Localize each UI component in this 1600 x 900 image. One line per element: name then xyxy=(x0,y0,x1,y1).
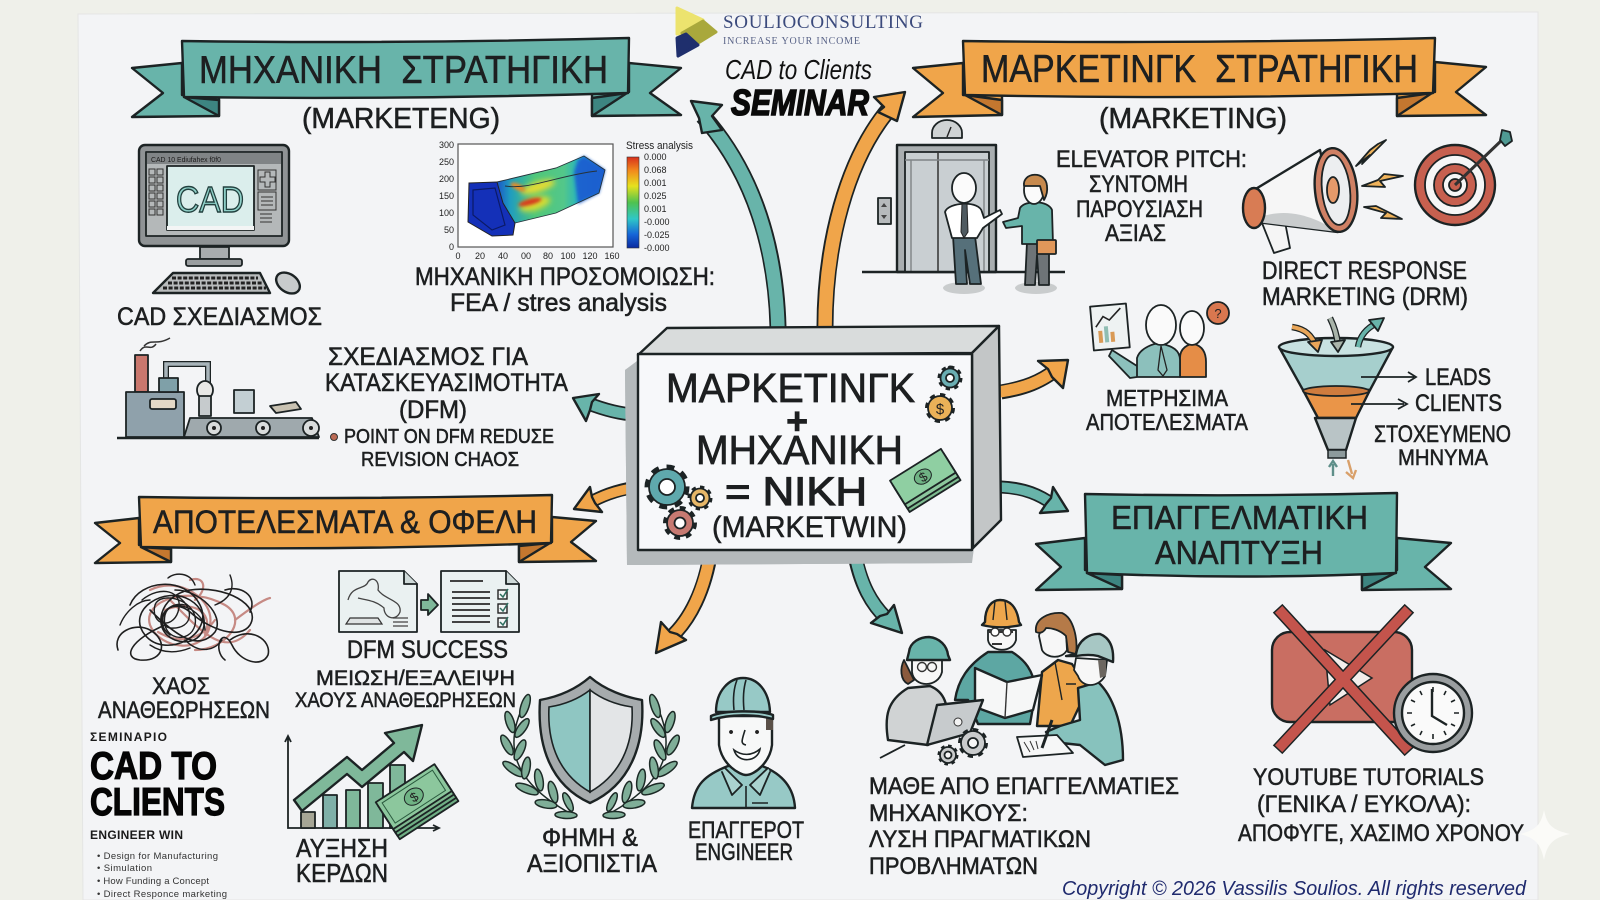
chart: FEA stress analysis: 0.068 xyxy=(644,165,667,175)
seminar script title: CAD to Clients xyxy=(725,54,872,85)
chart: FEA stress analysis: 0 xyxy=(449,242,454,252)
label: learn from professional engineers: ΛΥΣΗ ΠΡΑΓΜΑΤΙΚΩΝ xyxy=(869,826,1091,853)
chart: FEA stress analysis: 00 xyxy=(521,251,531,261)
icon: cash stack xyxy=(376,764,458,839)
arrow: orange to results banner xyxy=(574,487,640,512)
label: profit increase: ΚΕΡΔΩΝ xyxy=(296,858,388,888)
icon: crossed youtube with clock xyxy=(1272,613,1472,752)
banner: professional development xyxy=(1036,493,1451,590)
banner: professional development: ΑΝΑΠΤΥΞΗ xyxy=(1155,534,1323,571)
arrow: teal down to team xyxy=(854,548,902,633)
chart: FEA stress analysis: 200 xyxy=(439,174,454,184)
label: expert engineer: ENGINEER xyxy=(695,839,793,866)
text: design for manufacturability: POINT ON DFM REDUΣE xyxy=(344,426,554,448)
sidebar: seminar info: • Simulation xyxy=(97,863,152,874)
labels: funnel outputs: ΜΗΝΥΜΑ xyxy=(1398,445,1488,470)
chart: FEA stress analysis: 0.025 xyxy=(644,191,667,201)
panel: central box: (MARKETWIN) xyxy=(712,511,907,544)
chart: FEA stress analysis: -0.000 xyxy=(644,243,670,253)
icon: megaphone xyxy=(1243,140,1403,253)
chart: FEA stress analysis: 160 xyxy=(604,251,620,261)
arrow: teal to DFM xyxy=(573,394,640,421)
label: revision chaos: ΧΑΟΣ xyxy=(152,673,210,700)
text: elevator pitch: ΑΞΙΑΣ xyxy=(1105,220,1166,247)
sidebar: seminar info: ENGINEER WIN xyxy=(90,828,183,842)
icon: funnel xyxy=(1279,318,1416,478)
chart: FEA stress analysis: -0.025 xyxy=(644,230,670,240)
label: youtube tutorials warning xyxy=(1238,764,1524,847)
label: youtube tutorials warning: ΑΠΟΦΥΓΕ, ΧΑΣΙΜΟ ΧΡΟΝΟΥ xyxy=(1238,820,1524,847)
label: measuring results: ΜΕΤΡΗΣΙΜΑ xyxy=(1106,385,1229,411)
panel: central box: + xyxy=(786,401,808,443)
icon: profit growth chart xyxy=(285,725,458,839)
icon: cash stack: $ xyxy=(407,788,422,805)
copyright: Copyright © 2026 Vassilis Soulios. All rights reserved xyxy=(1062,878,1527,900)
icon: engineer xyxy=(692,678,795,808)
icon: CAD computer: CAD xyxy=(176,179,244,220)
label: learn from professional engineers: ΜΑΘΕ ΑΠΟ ΕΠΑΓΓΕΛΜΑΤΙΕΣ xyxy=(869,773,1179,800)
chart: FEA stress analysis: 0.001 xyxy=(644,178,667,188)
label: DFM success xyxy=(295,636,516,712)
chart: FEA stress analysis: 250 xyxy=(439,157,454,167)
logo: soulioconsulting: SOULIOCONSULTING xyxy=(723,12,923,33)
banner: engineering strategy xyxy=(132,38,681,117)
panel: central box: ΜΑΡΚΕΤΙΝΓΚ xyxy=(666,365,915,411)
label: DFM success: DFM SUCCESS xyxy=(347,636,508,664)
sidebar: seminar info: CLIENTS xyxy=(90,781,225,824)
seminar script title: SEMINAR xyxy=(731,82,869,123)
labels: funnel outputs xyxy=(1374,364,1511,470)
person: woman in orange vest xyxy=(1036,613,1088,726)
chart: FEA stress analysis: 300 xyxy=(439,140,454,150)
chart: FEA stress analysis: 40 xyxy=(498,251,508,261)
subtitle: marketeng: (MARKETENG) xyxy=(302,103,500,135)
label: learn from professional engineers xyxy=(869,773,1179,880)
labels: funnel outputs: CLIENTS xyxy=(1415,390,1502,417)
icon: factory conveyor xyxy=(117,338,319,438)
icon: team gears xyxy=(940,731,985,763)
sidebar: seminar info xyxy=(90,730,227,900)
label: expert engineer: ΕΠΑΓΓΕΡΟΤ xyxy=(688,817,804,844)
label: DFM success: ΜΕΙΩΣΗ/ΕΞΑΛΕΙΨΗ xyxy=(316,667,515,690)
icon: team of engineers xyxy=(880,600,1123,765)
icon: people with chart xyxy=(1090,302,1229,378)
chart: FEA stress analysis: 150 xyxy=(439,191,454,201)
open plans xyxy=(975,668,1042,718)
chart: FEA stress analysis: -0.000 xyxy=(644,217,670,227)
label: measuring results: ΑΠΟΤΕΛΕΣΜΑΤΑ xyxy=(1086,409,1249,435)
label: revision chaos: ΑΝΑΘΕΩΡΗΣΕΩΝ xyxy=(98,697,270,724)
label: direct response marketing: DIRECT RESPONSE xyxy=(1262,257,1467,285)
icon: target xyxy=(1415,130,1512,225)
icon: money on box: $ xyxy=(916,468,931,485)
arrow: orange to measuring results xyxy=(999,360,1068,392)
panel: central box: ΜΗΧΑΝΙΚΗ xyxy=(696,427,903,473)
text: elevator pitch xyxy=(1056,146,1247,247)
text: elevator pitch: ΠΑΡΟΥΣΙΑΣΗ xyxy=(1076,196,1203,223)
label: youtube tutorials warning: (ΓΕΝΙΚΑ / ΕΥΚΟΛΑ): xyxy=(1257,791,1471,818)
icon: gears on box xyxy=(648,368,960,537)
person: engineer with plans xyxy=(955,600,1036,724)
text: elevator pitch: ELEVATOR PITCH: xyxy=(1056,146,1247,173)
logo: soulioconsulting xyxy=(677,8,923,56)
label: youtube tutorials warning: YOUTUBE TUTORIALS xyxy=(1253,764,1484,791)
text: elevator pitch: ΣΥΝΤΟΜΗ xyxy=(1089,171,1188,198)
text: design for manufacturability: ΚΑΤΑΣΚΕΥΑΣΙΜΟΤΗΤΑ xyxy=(325,369,568,397)
label: DFM success: ΧΑΟΥΣ ΑΝΑΘΕΩΡΗΣΕΩΝ xyxy=(295,689,516,712)
sidebar: seminar info: • How Funding a Concept xyxy=(97,876,209,887)
sidebar: seminar info: • Design for Manufacturing xyxy=(97,851,218,862)
subtitle: marketing: (MARKETING) xyxy=(1099,103,1287,135)
sidebar: seminar info: • Direct Responce marketing xyxy=(97,889,227,900)
label: expert engineer xyxy=(688,817,804,866)
label: revision chaos xyxy=(98,673,270,724)
text: design for manufacturability: (DFM) xyxy=(399,396,467,424)
label: measuring results xyxy=(1086,385,1249,435)
logo: soulioconsulting: INCREASE YOUR INCOME xyxy=(723,36,860,47)
sidebar: seminar info: ΣΕΜΙΝΑΡΙΟ xyxy=(90,730,167,744)
banner: results and benefits: ΑΠΟΤΕΛΕΣΜΑΤΑ & ΟΦΕΛΗ xyxy=(153,504,537,540)
icon: shield with laurel xyxy=(498,677,682,819)
arrow: teal up-left to engineering strategy xyxy=(691,101,778,330)
label: profit increase: ΑΥΞΗΣΗ xyxy=(296,833,388,863)
icon: gears on box: $ xyxy=(936,401,945,418)
label: engineering simulation: FEA / stres analysis xyxy=(450,289,667,317)
person: man with grey helmet writing xyxy=(1017,634,1123,765)
panel: central box: = ΝΙΚΗ xyxy=(725,470,867,514)
seminar script title xyxy=(725,54,872,123)
label: profit increase xyxy=(296,833,388,888)
banner: marketing strategy xyxy=(913,38,1486,117)
text: design for manufacturability xyxy=(325,343,568,471)
banner: professional development: ΕΠΑΓΓΕΛΜΑΤΙΚΗ xyxy=(1111,499,1368,536)
chart: FEA stress analysis: 100 xyxy=(560,251,576,261)
icon: chaos scribble xyxy=(117,574,270,662)
icon: clock xyxy=(1394,674,1472,752)
arrow: orange down to reputation xyxy=(656,548,711,653)
chart: FEA stress analysis: Stress analysis xyxy=(626,140,693,152)
icon: two people talking xyxy=(943,173,1057,294)
panel: central box xyxy=(625,326,1001,565)
labels: funnel outputs: LEADS xyxy=(1425,364,1491,391)
label: direct response marketing xyxy=(1262,257,1468,311)
label: engineering simulation xyxy=(415,263,715,317)
chart: FEA stress analysis: 80 xyxy=(543,251,553,261)
banner: results and benefits xyxy=(95,495,596,563)
label: reputation and credibility: ΦΗΜΗ & xyxy=(542,824,638,852)
arrow: teal to professional development banner xyxy=(998,487,1068,513)
text: design for manufacturability: ΣΧΕΔΙΑΣΜΟΣ ΓΙΑ xyxy=(328,343,528,371)
labels: funnel outputs: ΣΤΟΧΕΥΜΕΝΟ xyxy=(1374,421,1511,448)
chart: FEA stress analysis: 0.000 xyxy=(644,152,667,162)
text: design for manufacturability: REVISION CHAOΣ xyxy=(361,449,519,471)
icon: CAD computer: CAD 10 Ediufahex f0f0 xyxy=(151,157,221,164)
icon: people with chart: ? xyxy=(1214,306,1222,321)
chart: FEA stress analysis xyxy=(439,140,693,261)
label: reputation and credibility xyxy=(527,824,657,878)
banner: engineering strategy: ΜΗΧΑΝΙΚΗ ΣΤΡΑΤΗΓΙΚΗ xyxy=(199,49,608,92)
label: CAD design: CAD ΣΧΕΔΙΑΣΜΟΣ xyxy=(117,303,322,331)
label: direct response marketing: MARKETING (DRM) xyxy=(1262,283,1468,311)
label: reputation and credibility: ΑΞΙΟΠΙΣΤΙΑ xyxy=(527,850,657,878)
label: learn from professional engineers: ΜΗΧΑΝΙΚΟΥΣ: xyxy=(869,800,1028,827)
chart: FEA stress analysis: 20 xyxy=(475,251,485,261)
icon: CAD computer xyxy=(139,145,304,298)
sidebar: seminar info: CAD TO xyxy=(90,745,217,788)
heat map beam xyxy=(468,156,605,236)
chart: FEA stress analysis: 50 xyxy=(444,225,454,235)
label: learn from professional engineers: ΠΡΟΒΛΗΜΑΤΩΝ xyxy=(869,853,1038,880)
banner: marketing strategy: ΜΑΡΚΕΤΙΝΓΚ ΣΤΡΑΤΗΓΙΚΗ xyxy=(981,48,1418,91)
icon: DFM documents xyxy=(339,571,519,632)
icon: money on box xyxy=(890,449,961,512)
chart: FEA stress analysis: 0 xyxy=(455,251,461,261)
label: engineering simulation: ΜΗΧΑΝΙΚΗ ΠΡΟΣΟΜΟΙΩΣΗ: xyxy=(415,263,715,291)
icon: elevator xyxy=(862,120,1065,272)
chart: FEA stress analysis: 100 xyxy=(439,208,454,218)
chart: FEA stress analysis: 120 xyxy=(582,251,598,261)
chart: FEA stress analysis: 0.001 xyxy=(644,204,667,214)
sparkle xyxy=(1520,810,1570,860)
arrow: orange up-right to marketing strategy xyxy=(825,92,905,330)
person: woman with laptop xyxy=(880,637,983,758)
